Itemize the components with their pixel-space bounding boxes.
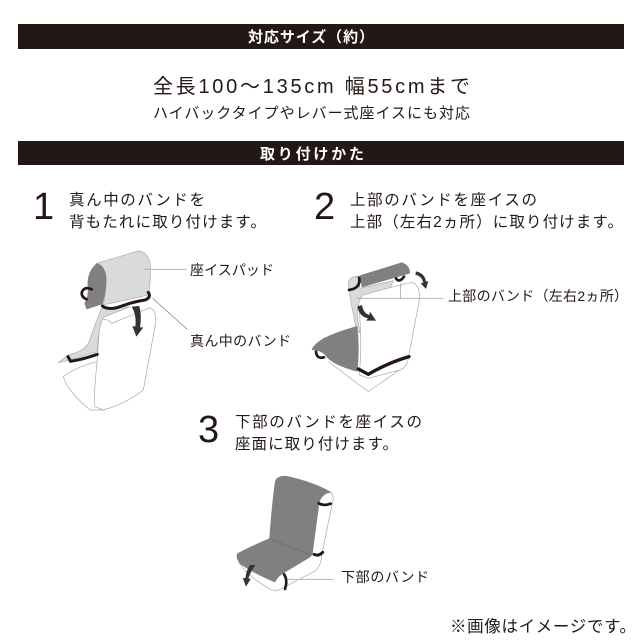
- dark seat pad: [312, 326, 359, 372]
- label: seat pad: 座イスパッド: [190, 262, 274, 278]
- upper band: [319, 503, 331, 505]
- step 2 text: 上部のバンドを座イスの: [350, 191, 537, 209]
- illustration: step 3 chair: [237, 476, 333, 590]
- light pad front: [97, 251, 150, 305]
- step 2 number: 2: [314, 186, 335, 228]
- arrow: [132, 306, 143, 337]
- heading bar: how to install: 取り付けかた: [260, 146, 364, 163]
- seat base: [328, 362, 407, 392]
- leader lines: [143, 268, 187, 271]
- arrow: [243, 565, 255, 587]
- seat outline: [63, 362, 140, 410]
- step 3 text: 座面に取り付けます。: [235, 435, 398, 453]
- heading bar: how to install: [18, 141, 624, 165]
- seat pad strip: [58, 307, 130, 363]
- top bands: [349, 278, 359, 290]
- compatibility note: ハイバックタイプやレバー式座イスにも対応: [153, 105, 470, 122]
- chair body: [239, 478, 333, 590]
- step 3 text: 下部のバンドを座イスの: [235, 413, 422, 431]
- label: upper band: 上部のバンド（左右2ヵ所）: [448, 288, 628, 304]
- size text: overall dimensions: 全長100〜135cm 幅55cmまで: [153, 75, 470, 98]
- crease: [270, 539, 311, 555]
- step 1 text: 真ん中のバンドを: [69, 191, 205, 209]
- step 3 text: [235, 413, 422, 453]
- band loop: [82, 288, 92, 299]
- heading bar: supported size: [18, 24, 624, 49]
- illustration: step 1 chair with pad: [58, 251, 187, 410]
- step 1 text: 背もたれに取り付けます。: [69, 213, 266, 231]
- label: middle band: 真ん中のバンド: [190, 333, 291, 349]
- step 1 number: 1: [33, 186, 54, 228]
- front band: [284, 574, 286, 589]
- step 2 text: [350, 191, 623, 231]
- chair back: [94, 308, 156, 410]
- step 3 number: 3: [198, 409, 219, 451]
- middle band: [102, 292, 149, 309]
- dark top pad: [356, 262, 410, 287]
- dark pad: [237, 476, 332, 582]
- step 2 text: 上部（左右2ヵ所）に取り付けます。: [350, 213, 623, 231]
- middle band: [314, 552, 323, 555]
- arrows: [415, 271, 428, 289]
- light strip: [348, 277, 393, 333]
- illustration: step 2 chair: [312, 262, 443, 392]
- step 1 text: [69, 191, 266, 231]
- dark pad underside: [84, 263, 106, 309]
- heading bar: supported size: 対応サイズ（約）: [248, 28, 374, 46]
- leader line: [288, 578, 333, 581]
- chair back: [357, 282, 419, 378]
- footnote: ※画像はイメージです。: [450, 617, 636, 636]
- label: lower band: 下部のバンド: [341, 569, 429, 585]
- leader lines: [357, 297, 443, 300]
- lower band: [68, 354, 97, 361]
- bottom band: [358, 357, 409, 374]
